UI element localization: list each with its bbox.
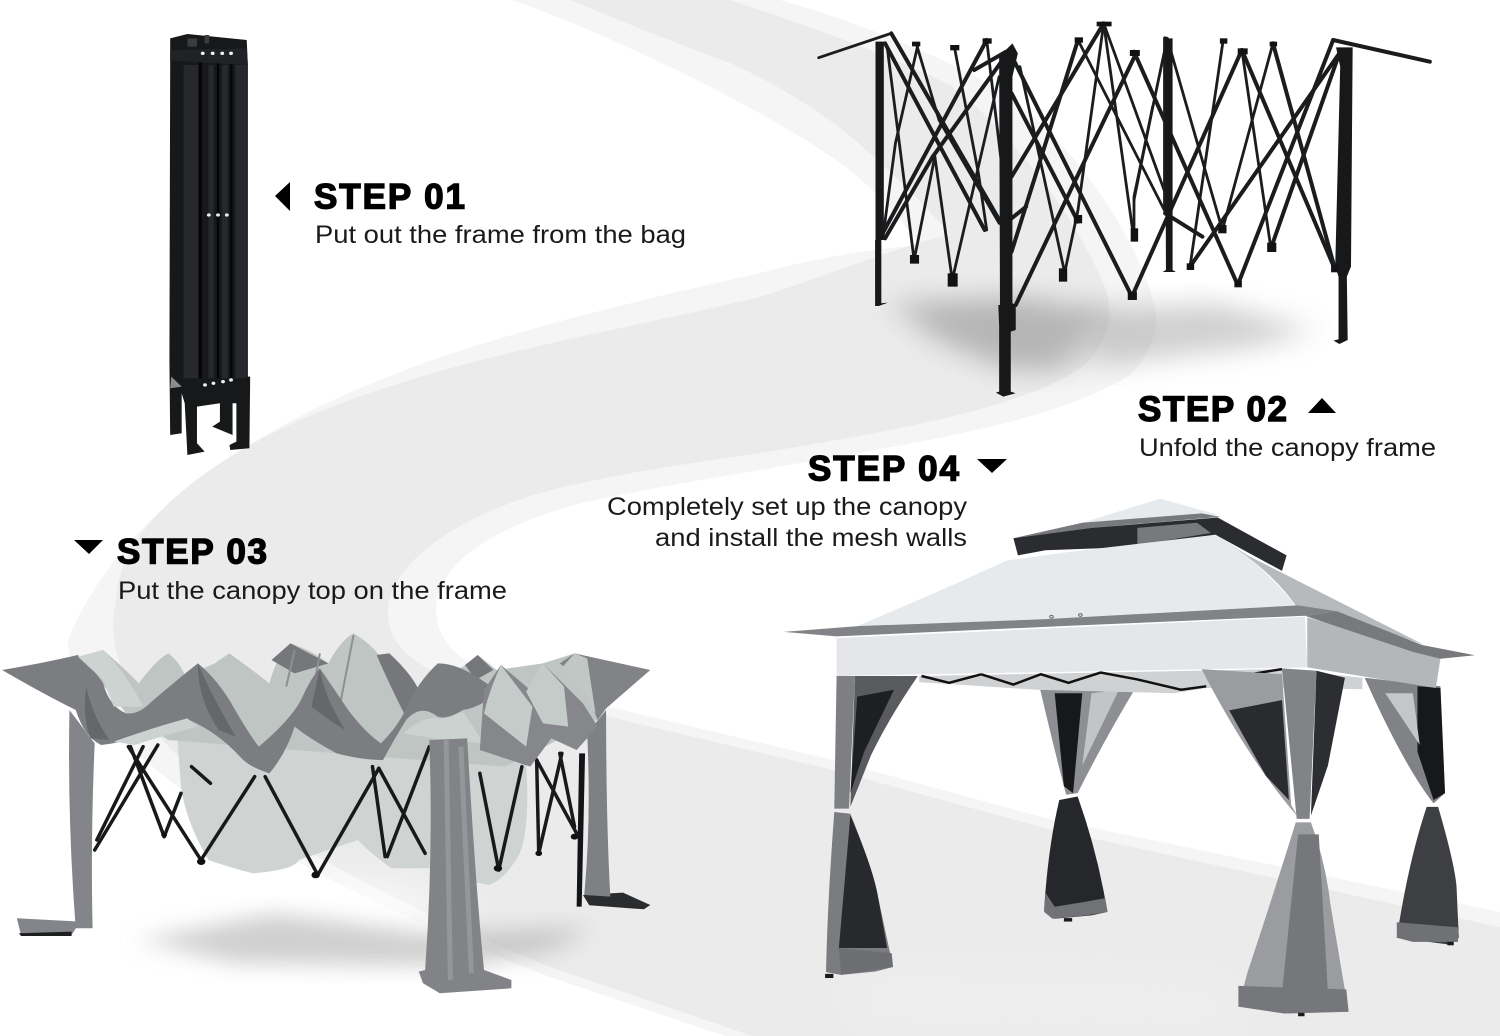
back-right sleeve	[584, 710, 610, 897]
front valance	[837, 617, 1307, 676]
back fabric peaks	[80, 633, 598, 767]
strut end knobs	[910, 22, 1339, 300]
back-left curtain	[1039, 681, 1140, 919]
front eave	[784, 605, 1337, 636]
eyelets	[1050, 614, 1082, 618]
front-right curtain	[1202, 668, 1349, 1013]
step 02 label	[1138, 390, 1436, 462]
left corner light fold	[78, 650, 143, 707]
eaves underside with frame	[919, 669, 1362, 693]
step 04 label	[607, 450, 1007, 552]
left sleeve and bag	[17, 710, 95, 935]
step 03 label	[74, 532, 507, 605]
strut knobs	[161, 833, 578, 878]
back light fabric	[177, 730, 527, 885]
front drape	[2, 655, 497, 773]
right drape	[480, 663, 598, 767]
heading: STEP 03	[117, 532, 267, 572]
right corner flap	[560, 653, 650, 720]
description: Put the canopy top on the frame	[118, 577, 507, 605]
left bag strap	[19, 932, 72, 936]
soft light patch on floor	[860, 992, 1230, 1012]
floor shadow	[139, 913, 589, 967]
frame struts	[95, 745, 577, 875]
heading: STEP 02	[1138, 390, 1287, 429]
back-right curtain	[1365, 678, 1459, 945]
arrow left	[275, 182, 290, 211]
feet	[825, 918, 1454, 1016]
light fabric trim	[114, 712, 484, 745]
main roof front	[857, 535, 1296, 626]
step 04 label: and install the mesh walls	[655, 524, 967, 552]
front-left curtain	[826, 676, 918, 975]
arrow up	[1308, 398, 1336, 413]
step 03: frame with canopy top	[2, 633, 650, 993]
white floor glow	[84, 887, 442, 987]
description: Put out the frame from the bag	[315, 221, 686, 249]
top roof dark trim	[1013, 513, 1220, 538]
main roof right side	[1215, 535, 1424, 645]
heading: STEP 01	[314, 178, 465, 216]
step 01 label	[275, 178, 686, 249]
drape folds	[85, 663, 345, 740]
description: Completely set up the canopy	[607, 493, 968, 521]
top roof	[1082, 499, 1218, 528]
front-right sleeve and weight bag	[419, 738, 511, 993]
heading: STEP 04	[808, 450, 960, 488]
step 01: folded frame	[169, 34, 250, 455]
back-right weight bag	[583, 893, 650, 909]
description: Unfold the canopy frame	[1139, 434, 1436, 462]
right eave	[1305, 611, 1475, 659]
step 04: finished gazebo	[784, 499, 1475, 1016]
back-right pole	[572, 753, 585, 907]
step 02: unfolded frame	[819, 22, 1430, 397]
right valance	[1307, 617, 1440, 688]
floor shadow	[891, 297, 1314, 370]
vent mesh	[1013, 518, 1287, 571]
arrow down	[977, 459, 1007, 473]
arrow down	[74, 540, 103, 554]
scissor struts	[819, 23, 1430, 305]
corner posts	[875, 38, 1353, 397]
